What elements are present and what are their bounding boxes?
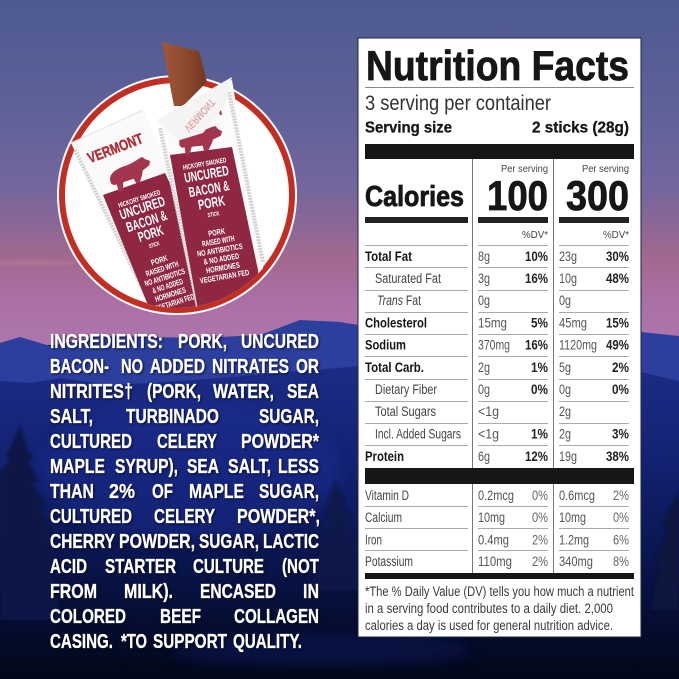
row: sodium: 370mg — [478, 336, 510, 352]
calories header — [365, 163, 629, 241]
ingredients text block: SALT, — [228, 455, 271, 478]
packet label: BACON & — [187, 177, 231, 200]
ingredients text block: ADDED — [150, 355, 205, 378]
row: saturated fat: 10g — [559, 270, 577, 286]
ingredients text block: MILK). — [124, 580, 173, 603]
packet label: RAISED WITH — [145, 259, 180, 279]
ingredients text block: ENCASED — [200, 580, 276, 603]
product badge: circle with two meat stick packets — [57, 42, 297, 315]
meat stick — [162, 42, 207, 106]
brand logo fragment: NT — [204, 101, 226, 121]
packet label: HICKORY SMOKED — [118, 189, 162, 210]
ingredients text block: OR — [296, 355, 319, 378]
ingredients text block: SUGAR, — [199, 530, 259, 553]
row: dietary fiber — [375, 381, 629, 397]
row: vitamin d: 0% — [532, 488, 548, 503]
row: cholesterol: 5% — [531, 316, 548, 330]
ingredients text block: UNCURED — [241, 330, 319, 353]
row: vitamin d: 0.2mcg — [478, 487, 514, 503]
packet label: NO ANTIBIOTICS — [196, 242, 244, 259]
ingredients text block: POWDER* — [241, 430, 319, 453]
packet label: UNCURED — [183, 162, 230, 186]
row: total sugars: 2g — [559, 403, 571, 419]
ingredients text block: BEEF — [160, 605, 201, 628]
row: total fat: 23g — [559, 248, 577, 264]
ingredients text block: (NOT — [282, 555, 319, 578]
row: vitamin d: Vitamin D — [365, 488, 409, 503]
ingredients text block: TURBINADO — [126, 405, 219, 428]
row: dietary fiber: 0% — [612, 382, 629, 397]
footnote: in a serving food contributes to a daily diet. 2,000 — [365, 601, 613, 616]
row: protein — [365, 448, 629, 464]
packet label: NO ANTIBIOTICS — [144, 267, 187, 288]
row: potassium: 340mg — [559, 553, 593, 569]
torn foil flap: VERMONT — [181, 96, 217, 134]
packet label — [180, 157, 250, 286]
ingredients text block: COLLAGEN — [234, 605, 319, 628]
ingredients text block: CULTURED — [50, 430, 132, 453]
calories header: Calories — [365, 181, 464, 213]
row: total sugars — [375, 403, 571, 419]
right packet — [157, 80, 264, 310]
serving size — [365, 120, 629, 136]
row: saturated fat: 48% — [606, 271, 629, 286]
packet label: PORK — [197, 192, 226, 213]
packet label: HORMONES — [205, 260, 241, 275]
row: potassium: 2% — [532, 554, 548, 569]
ingredients text block: SUGAR, — [259, 480, 319, 503]
row: cholesterol: 45mg — [559, 314, 587, 330]
ingredients text block: LESS — [278, 455, 319, 478]
row: vitamin d: 2% — [613, 488, 629, 503]
row: protein: Protein — [365, 449, 404, 464]
row: iron: 1.2mg — [559, 532, 589, 548]
row: trans fat — [377, 292, 571, 308]
row: trans fat: 0g — [559, 292, 571, 308]
row: potassium: Potassium — [365, 554, 413, 569]
row: calcium: Calcium — [365, 510, 402, 525]
row: sodium: Sodium — [365, 338, 406, 352]
packet label: BACON & — [124, 207, 169, 235]
footnote — [365, 584, 634, 633]
calories header: 300 — [566, 172, 629, 219]
packet label: STICK — [148, 241, 161, 250]
ingredients text block: MAPLE — [189, 480, 244, 503]
packet label — [118, 190, 194, 308]
torn foil flap — [157, 77, 232, 140]
row: saturated fat: Saturated Fat — [375, 271, 441, 286]
ingredients text block: ACID — [50, 555, 87, 578]
packet label: PORK — [208, 227, 226, 238]
pig icon — [110, 157, 150, 192]
packet label: VEGETARIAN FED — [199, 268, 250, 286]
ingredients text block: SEA — [287, 380, 319, 403]
ingredients text block: NITRATES — [212, 355, 289, 378]
row: saturated fat: 16% — [525, 271, 548, 286]
row: total carb: 5g — [559, 359, 571, 375]
row: potassium — [365, 553, 629, 569]
row: total fat — [365, 248, 629, 264]
packet label: & NO ADDED — [203, 251, 240, 267]
ingredients text block: POWDER, — [119, 530, 195, 553]
calories header: %DV* — [522, 229, 548, 241]
row: cholesterol: 15mg — [478, 314, 507, 330]
ingredients text block: WATER, — [213, 380, 274, 403]
packet label: PORK — [150, 253, 169, 267]
badge ring — [57, 75, 297, 315]
row: trans fat: 0g — [478, 292, 490, 308]
ingredients text block: LACTIC — [263, 530, 319, 553]
row: total carb: 2% — [612, 360, 629, 375]
row: iron — [365, 532, 629, 548]
ingredients text block: NITRITES† — [50, 380, 133, 403]
packet label: VEGETARIAN FED — [151, 292, 196, 314]
ingredients text block: NO — [121, 355, 143, 378]
ingredients text block: CHERRY — [50, 530, 115, 553]
row: protein: 6g — [478, 448, 490, 464]
row: saturated fat — [375, 270, 629, 286]
row: total fat: 8g — [478, 248, 490, 264]
row: added sugars: 1% — [531, 426, 548, 442]
row: trans fat: Trans Fat — [377, 293, 421, 308]
row: added sugars: Incl. Added Sugars — [375, 426, 461, 442]
row: vitamin d — [365, 487, 629, 503]
row: added sugars: 3% — [612, 426, 629, 442]
ingredients text block: (PORK, — [147, 380, 201, 403]
row: total carb: 1% — [531, 360, 548, 375]
packet label: RAISED WITH — [201, 234, 235, 249]
row: total carb — [365, 359, 629, 375]
row: iron: 6% — [613, 532, 629, 548]
ingredients text block — [50, 330, 320, 653]
row: iron: 0.4mg — [478, 532, 509, 548]
row: vitamin d: 0.6mcg — [559, 487, 595, 503]
ingredients text block: THAN — [50, 480, 94, 503]
row: sodium: 16% — [525, 338, 548, 352]
row: potassium: 110mg — [478, 553, 512, 569]
row: dietary fiber: Dietary Fiber — [375, 382, 437, 397]
packet label: UNCURED — [117, 193, 167, 223]
ingredients text block: COLORED — [50, 605, 126, 628]
brand logo: VERMONT — [85, 130, 146, 167]
row: sodium: 1120mg — [559, 336, 597, 352]
row: calcium: 10mg — [478, 509, 505, 525]
packet label: STICK — [207, 211, 221, 219]
ingredients text block: BACON- — [50, 355, 109, 378]
row: iron: 2% — [532, 532, 548, 548]
row: sodium: 49% — [606, 338, 629, 352]
row: added sugars: <1g — [478, 426, 499, 442]
serving size: Serving size — [365, 120, 452, 136]
row: total fat: 30% — [606, 249, 629, 264]
ingredients text block: SUGAR, — [259, 405, 319, 428]
ingredients text block: POWDER*, — [237, 505, 320, 528]
ingredients text block: 2% — [109, 480, 135, 503]
row: iron: Iron — [365, 532, 382, 548]
row: dietary fiber: 0% — [531, 382, 548, 397]
ingredients text block: STARTER — [105, 555, 176, 578]
packet label: PORK — [136, 222, 165, 245]
packet label: HORMONES — [154, 285, 187, 304]
packet label: & NO ADDED — [151, 277, 184, 295]
row: calcium: 0% — [532, 510, 548, 525]
panel: nutrition facts — [358, 38, 641, 637]
ingredients text block: FROM — [50, 580, 97, 603]
row: total fat: Total Fat — [365, 249, 412, 264]
row: cholesterol: 15% — [606, 316, 629, 330]
footnote: calories a day is used for general nutrition advice. — [365, 618, 613, 633]
calories header: Per serving — [501, 163, 548, 175]
row: cholesterol: Cholesterol — [365, 316, 427, 330]
row: dietary fiber: 0g — [478, 381, 490, 397]
row: protein: 38% — [606, 449, 629, 464]
row: protein: 19g — [559, 448, 577, 464]
row: total sugars: <1g — [478, 403, 499, 419]
row: sodium — [365, 336, 629, 352]
row: dietary fiber: 0g — [559, 381, 571, 397]
ingredients text block: IN — [303, 580, 319, 603]
left packet — [71, 110, 232, 315]
ingredients text block: OF — [152, 480, 173, 503]
row: calcium: 0% — [613, 510, 629, 525]
ingredients text block: CULTURE — [193, 555, 264, 578]
row: potassium: 8% — [613, 554, 629, 569]
ingredients text block: QUALITY. — [233, 630, 302, 653]
row: added sugars — [375, 426, 629, 442]
packet label: HICKORY SMOKED — [182, 157, 227, 172]
pig icon — [178, 126, 224, 156]
ingredients text block: SEA — [187, 455, 219, 478]
ingredients text block: SUPPORT — [153, 630, 227, 653]
row: protein: 12% — [525, 449, 548, 464]
title: Nutrition Facts — [366, 42, 629, 89]
row: calcium: 10mg — [559, 509, 586, 525]
ingredients text block: PORK, — [178, 330, 227, 353]
ingredients text block: SYRUP), — [115, 455, 178, 478]
row: cholesterol — [365, 314, 629, 330]
serving size: 2 sticks (28g) — [532, 120, 629, 136]
row: added sugars: 2g — [559, 426, 571, 442]
row: calcium — [365, 509, 629, 525]
calories header: 100 — [487, 172, 548, 219]
ingredients text block: CELERY — [157, 430, 217, 453]
ingredients text block: CULTURED — [50, 505, 132, 528]
ingredients text block: *TO — [121, 630, 147, 653]
calories header: %DV* — [603, 229, 629, 241]
row: total fat: 10% — [525, 249, 548, 264]
ingredients text block: MAPLE — [50, 455, 105, 478]
row: saturated fat: 3g — [478, 270, 490, 286]
row: total carb: Total Carb. — [365, 360, 424, 375]
ingredients text block: CASING. — [50, 630, 113, 653]
calories header: Per serving — [582, 163, 629, 175]
row: total carb: 2g — [478, 359, 490, 375]
ingredients text block: CELERY — [154, 505, 215, 528]
row: total sugars: Total Sugars — [375, 404, 436, 419]
ingredients text block: INGREDIENTS: — [50, 330, 163, 353]
servings per container: 3 serving per container — [365, 91, 551, 115]
ingredients text block: SALT, — [50, 405, 93, 428]
